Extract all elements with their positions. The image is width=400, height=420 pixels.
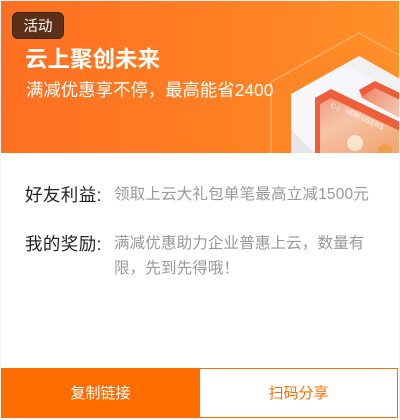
tag: activity — [12, 12, 64, 39]
button: copy link — [1, 368, 200, 418]
button: scan to share — [199, 368, 398, 418]
heading: 云上聚创未来 — [25, 47, 160, 72]
label: friend benefit: 好友利益: — [25, 185, 102, 205]
tag: activity: 活动 — [24, 19, 52, 35]
row: friend benefit — [25, 185, 369, 205]
card logo: C-) — [329, 102, 341, 113]
label: my reward: 我的奖励: — [25, 234, 102, 254]
panel: banner — [1, 1, 399, 153]
description: my reward: 限，先到先得哦！ — [114, 260, 239, 277]
button: copy link: 复制链接 — [70, 385, 130, 402]
button: scan to share: 扫码分享 — [268, 385, 328, 402]
description: my reward: 满减优惠助力企业普惠上云，数量有 — [114, 235, 364, 252]
subheading: 满减优惠享不停，最高能省2400 — [26, 80, 273, 100]
card label: NEW USERS — [343, 107, 385, 132]
illustration: hexagon with cards — [270, 32, 399, 153]
description: friend benefit: 领取上云大礼包单笔最高立减1500元 — [114, 186, 369, 203]
row: my reward — [25, 234, 364, 277]
description: my reward — [114, 234, 364, 277]
